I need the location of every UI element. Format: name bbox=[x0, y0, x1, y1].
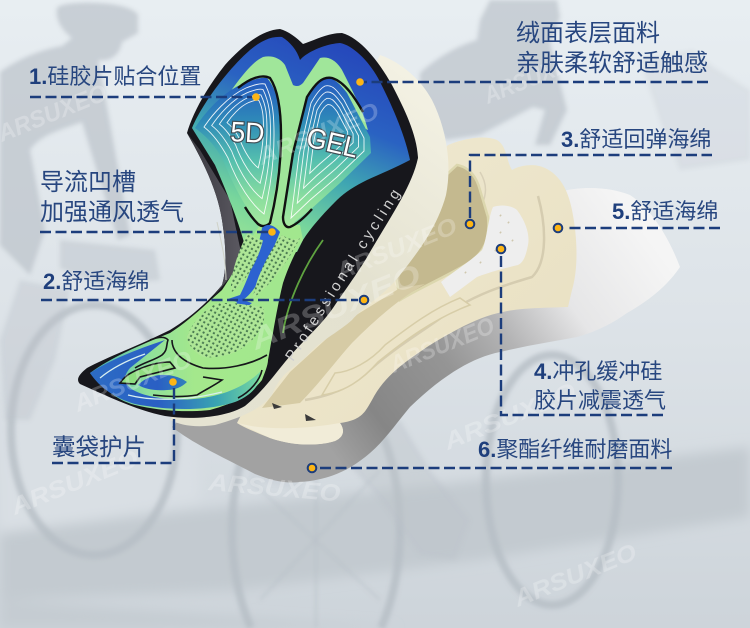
watermarks: ARSUXEO bbox=[385, 312, 499, 379]
watermarks: ARSUXEO bbox=[253, 97, 383, 171]
label 5: 5.舒适海绵 bbox=[612, 199, 718, 224]
front blue rim bbox=[90, 340, 260, 409]
front black seam lines bbox=[120, 337, 267, 398]
black panel green pinstripe bbox=[283, 240, 323, 333]
label 4: 冲孔缓冲硅 bbox=[552, 359, 662, 384]
leader lines bbox=[30, 82, 720, 468]
front backing layer, ivory velvet bbox=[170, 55, 448, 426]
centre blue channel bbox=[227, 225, 280, 322]
rider right bbox=[420, 0, 567, 145]
label 2: 2.舒适海绵 bbox=[43, 269, 149, 294]
perforated panels bbox=[187, 232, 300, 357]
watermarks: ARSUXEO bbox=[479, 45, 588, 110]
pad blue to green face bbox=[192, 37, 410, 252]
Professional cycling text: Professional cycling bbox=[282, 186, 404, 364]
label 4: 胶片减震透气 bbox=[534, 388, 666, 413]
watermarks: ARSUXEO bbox=[245, 258, 426, 357]
label groove: 加强通风透气 bbox=[40, 199, 184, 226]
layer 5 foam and cast shadow bbox=[172, 188, 680, 483]
marker dots bbox=[169, 78, 562, 472]
watermarks: ARSUXEO bbox=[439, 378, 580, 456]
watermarks: ARSUXEO bbox=[331, 212, 461, 286]
watermarks: ARSUXEO bbox=[509, 539, 641, 613]
right gel bbox=[283, 78, 371, 228]
watermarks: ARSUXEO bbox=[206, 469, 342, 508]
pad upper green band bbox=[228, 56, 368, 240]
label 3: 3.舒适回弹海绵 bbox=[561, 127, 711, 152]
watermarks bbox=[0, 45, 641, 613]
left gel bbox=[195, 76, 281, 226]
label velvet surface: 绒面表层面料 bbox=[516, 20, 660, 47]
label velvet surface: 亲肤柔软舒适触感 bbox=[516, 50, 708, 77]
pad black shell bbox=[78, 29, 418, 418]
rider left bbox=[0, 3, 138, 275]
pad left side band bbox=[187, 133, 243, 296]
watermarks: ARSUXEO bbox=[6, 445, 143, 521]
watermarks: ARSUXEO bbox=[69, 346, 196, 418]
label 1: 1.硅胶片贴合位置 bbox=[29, 64, 201, 89]
label 6: 6.聚酯纤维耐磨面料 bbox=[478, 437, 672, 462]
drivetrain bbox=[345, 420, 470, 560]
label groove: 导流凹槽 bbox=[40, 169, 136, 196]
label 4: 4. bbox=[534, 359, 552, 384]
label pouch guard: 囊袋护片 bbox=[52, 434, 146, 460]
lower ridged foam bbox=[262, 284, 425, 408]
5D GEL logo bbox=[230, 116, 361, 164]
tan cushion bbox=[395, 165, 488, 300]
front blue oval bbox=[138, 375, 187, 390]
5D GEL logo: 5D bbox=[230, 116, 265, 149]
seat pad bbox=[78, 29, 418, 418]
layer 3 and 4 outer cream foam bbox=[237, 138, 576, 445]
pad lower green body bbox=[90, 225, 303, 411]
white perforated silicone patch bbox=[441, 206, 529, 297]
5D GEL logo: GEL bbox=[304, 122, 361, 164]
